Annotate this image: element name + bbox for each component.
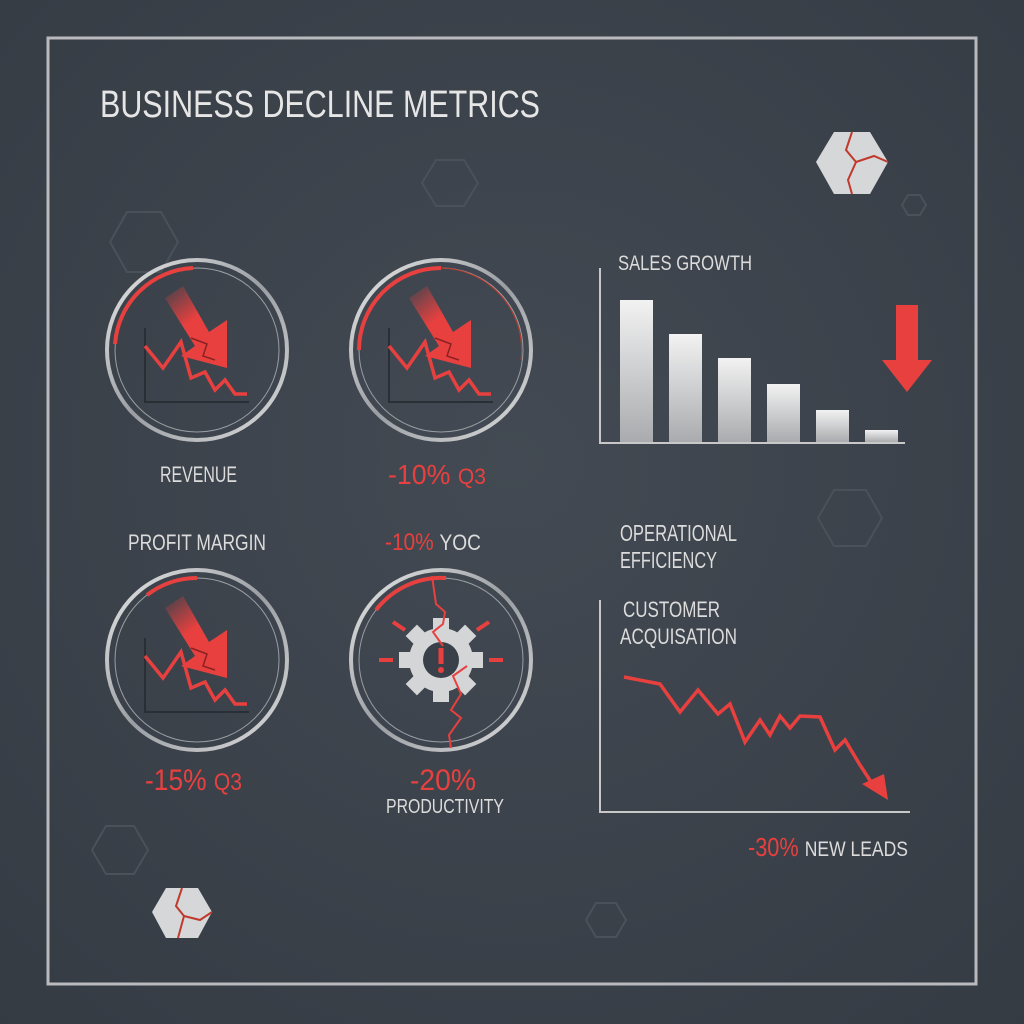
gauge: profit margin (107, 570, 287, 750)
label: -20% productivity: -20% (410, 764, 476, 797)
label: operational efficiency (620, 520, 737, 573)
bar chart: sales growth (600, 252, 932, 443)
icon: cracked hexagon bottom (152, 888, 212, 938)
gauge: q3 (351, 260, 531, 440)
label: -10% q3: -10% Q3 (388, 459, 486, 490)
label: -20% productivity: PRODUCTIVITY (386, 796, 504, 818)
label: operational efficiency: OPERATIONAL (620, 520, 737, 546)
line chart: customer acquisition: CUSTOMER (623, 597, 720, 622)
line chart: customer acquisition (600, 597, 910, 812)
gauge: revenue (107, 260, 287, 440)
label: -20% productivity (386, 764, 504, 818)
label: -15% q3: -15% Q3 (145, 764, 242, 797)
gauge: productivity gear (351, 570, 531, 750)
icon: red down arrow (882, 305, 932, 392)
label: -10% yoc: -10% YOC (385, 529, 481, 556)
icon: cracked hexagon top (816, 132, 888, 194)
line chart: customer acquisition: ACQUISATION (620, 624, 737, 649)
bar chart: sales growth: SALES GROWTH (618, 252, 752, 275)
label: operational efficiency: EFFICIENCY (620, 547, 717, 573)
label: revenue: REVENUE (160, 462, 237, 487)
label: -30% new leads: -30% NEW LEADS (748, 832, 908, 862)
label: profit margin: PROFIT MARGIN (128, 530, 266, 555)
title: BUSINESS DECLINE METRICS (100, 84, 540, 126)
decorative hexagons (92, 160, 926, 937)
